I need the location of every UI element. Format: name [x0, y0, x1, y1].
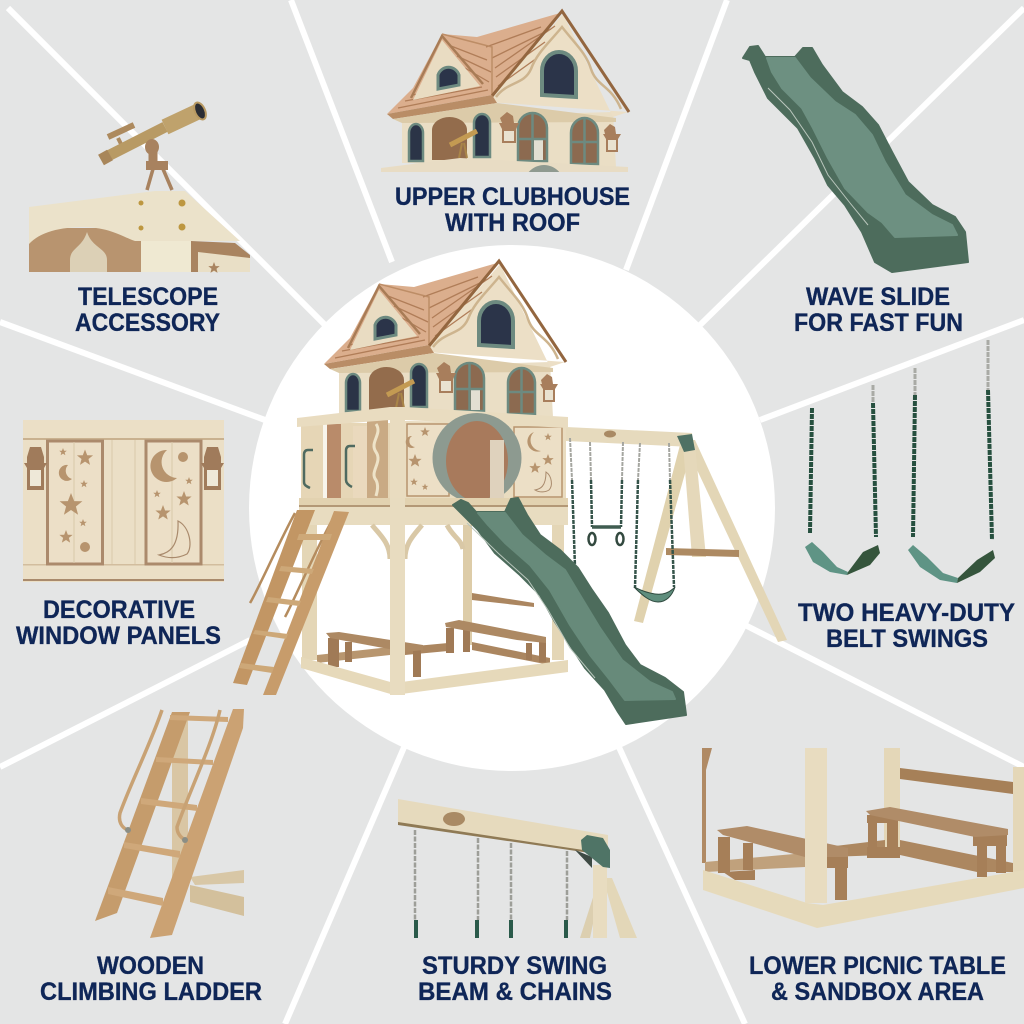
label: belt swings — [798, 599, 1015, 653]
swing chains, trapeze and belt swing — [570, 438, 675, 602]
label: climbing ladder: WOODEN — [97, 952, 204, 980]
label: belt swings: BELT SWINGS — [826, 625, 988, 653]
back posts, rails and benches — [317, 525, 550, 677]
deck walls and railing — [297, 407, 568, 525]
panel: climbing ladder — [40, 709, 262, 1006]
icon: beam and chains — [398, 799, 637, 938]
label: telescope accessory: TELESCOPE — [78, 283, 218, 311]
label: wave slide — [794, 283, 963, 337]
label: upper clubhouse: UPPER CLUBHOUSE — [395, 183, 630, 211]
label: decorative window panels: DECORATIVE — [43, 596, 195, 624]
label: swing beam: STURDY SWING — [422, 952, 607, 980]
center white circle — [249, 245, 775, 771]
panel: picnic table and sandbox — [702, 748, 1024, 1006]
deck posts and frame — [301, 407, 568, 695]
label: wave slide: WAVE SLIDE — [806, 283, 950, 311]
panel: upper clubhouse — [381, 11, 630, 237]
panel: belt swings — [798, 340, 1015, 653]
label: upper clubhouse: WITH ROOF — [445, 209, 580, 237]
label: climbing ladder: CLIMBING LADDER — [40, 978, 262, 1006]
label: decorative window panels: WINDOW PANELS — [16, 622, 221, 650]
panel: swing beam — [398, 799, 637, 1006]
main playset — [233, 261, 787, 724]
large green slide — [453, 498, 686, 724]
label: telescope accessory — [75, 283, 220, 337]
panel: wave slide — [743, 46, 968, 337]
icon: two belt swings — [805, 340, 995, 583]
icon: benches and sandbox frame — [702, 748, 1024, 928]
label: upper clubhouse — [395, 183, 630, 237]
icon: wooden ladder — [95, 709, 244, 938]
icon: telescope on wall — [29, 101, 250, 273]
label: picnic table and sandbox — [749, 952, 1006, 1006]
label: swing beam: BEAM & CHAINS — [418, 978, 612, 1006]
panel: telescope accessory — [29, 101, 250, 337]
label: swing beam — [418, 952, 612, 1006]
label: decorative window panels — [16, 596, 221, 650]
icon: clubhouse — [381, 8, 630, 172]
icon: green wave slide — [743, 46, 968, 272]
swing set A-frame — [566, 427, 787, 642]
icon: star and moon panels — [23, 420, 224, 582]
label: telescope accessory: ACCESSORY — [75, 309, 220, 337]
panel: decorative window panels — [16, 420, 224, 650]
label: wave slide: FOR FAST FUN — [794, 309, 963, 337]
ladder — [233, 510, 349, 695]
label: picnic table and sandbox: & SANDBOX AREA — [771, 978, 984, 1006]
clubhouse — [324, 261, 566, 417]
label: belt swings: TWO HEAVY-DUTY — [798, 599, 1015, 627]
label: picnic table and sandbox: LOWER PICNIC TABLE — [749, 952, 1006, 980]
label: climbing ladder — [40, 952, 262, 1006]
